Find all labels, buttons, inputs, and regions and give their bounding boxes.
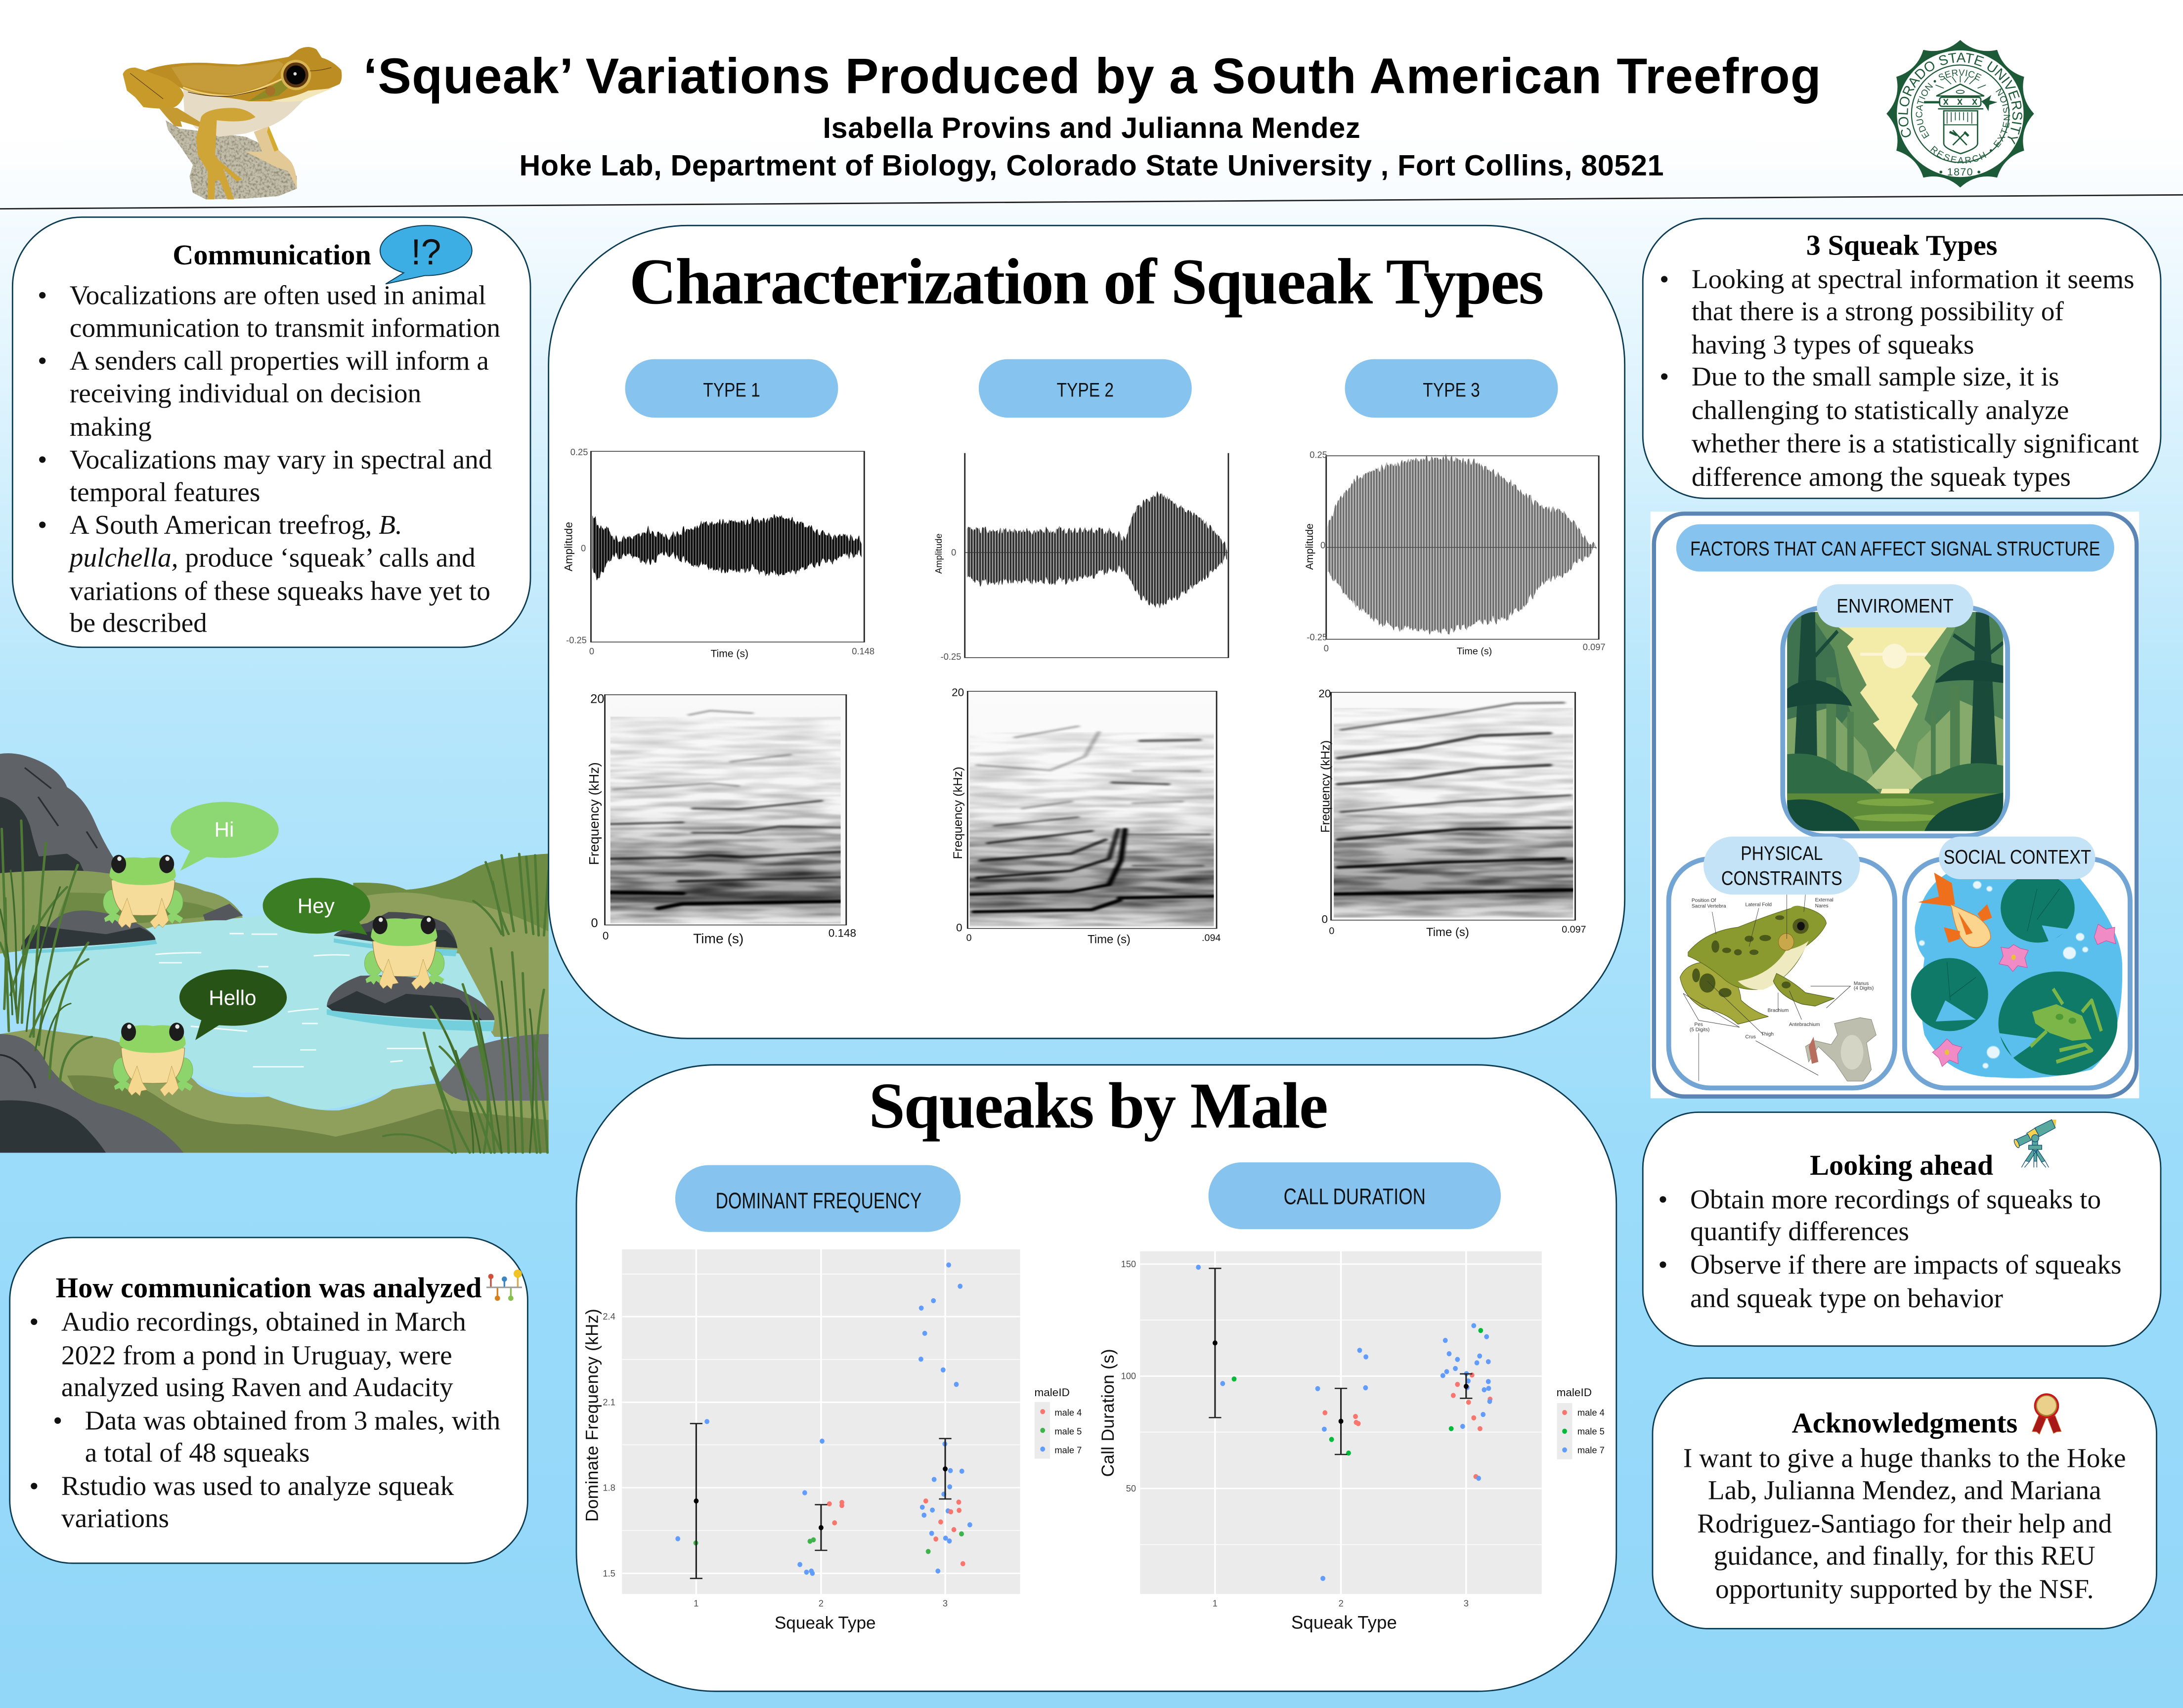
chart: type 1 spectrogram [586, 692, 856, 946]
chart: dominant frequency scatter: Squeak Type [775, 1613, 876, 1632]
anatomy labels: (4 Digits) [1854, 986, 1874, 991]
text block: squeak types bullets: whether there is a statistically significant [1692, 428, 2139, 458]
text block: squeak types bullets: difference among the squeak types [1692, 462, 2071, 492]
text block: communication bullets: communication to transmit information [70, 313, 500, 343]
chart: type 3 spectrogram: 0.097 [1562, 924, 1586, 935]
chart: type 3 spectrogram [1318, 687, 1586, 939]
chart: type 1 waveform: 0 [589, 646, 594, 656]
anatomy labels: Pes [1694, 1022, 1703, 1027]
panel: factors that can affect signal structure [1651, 512, 2139, 1098]
text block: communication bullets: Vocalizations may vary in spectral and [70, 444, 492, 474]
text block: communication bullets: • [38, 510, 47, 540]
chart: type 2 waveform: -0.25 [941, 651, 961, 662]
anatomy labels: Antebrachium [1789, 1022, 1820, 1027]
pill: social context: SOCIAL CONTEXT [1944, 847, 2091, 868]
chart: call duration scatter: 50 [1126, 1483, 1136, 1494]
heading: how communication was analyzed: How communication was analyzed [56, 1272, 481, 1304]
anatomy labels: Lateral Fold [1746, 902, 1772, 908]
pill: type 2: TYPE 2 [1057, 380, 1114, 401]
chart: type 2 waveform: Amplitude [933, 533, 944, 574]
chart: call duration scatter: Squeak Type [1291, 1612, 1397, 1632]
illustration: social context pond [1905, 837, 2130, 1088]
chart: dominant frequency scatter [583, 1249, 1082, 1632]
text block: looking ahead bullets: • [1658, 1184, 1668, 1214]
text block: communication bullets: making [70, 412, 152, 442]
chart: dominant frequency scatter: male 5 [1054, 1426, 1082, 1437]
heading: squeaks by male: Squeaks by Male [869, 1069, 1328, 1142]
heading: 3 squeak types: 3 Squeak Types [1806, 229, 1997, 261]
anatomy labels: Crus [1746, 1034, 1756, 1040]
pill: factors heading [1676, 524, 2114, 572]
text block: communication bullets: • [38, 345, 47, 376]
header divider line [0, 195, 2183, 209]
text block: looking ahead bullets: quantify differences [1690, 1216, 1909, 1246]
logo: Colorado State University seal: • 1870 • [1939, 166, 1981, 178]
text block: squeak types bullets: • [1659, 264, 1669, 294]
chart: type 1 spectrogram: 0.148 [829, 927, 856, 939]
text block: acknowledgments: guidance, and finally, for this REU [1714, 1540, 2096, 1571]
affiliation: Hoke Lab, Department of Biology, Colorado State University , Fort Collins, 80521 [519, 149, 1664, 182]
chart: type 2 spectrogram: 0 [956, 921, 962, 934]
anatomy labels: (5 Digits) [1690, 1027, 1709, 1032]
anatomy labels: Thigh [1761, 1032, 1774, 1037]
anatomy labels: Brachium [1768, 1008, 1789, 1014]
anatomy labels: Position Of [1692, 898, 1716, 903]
chart: dominant frequency scatter: 1.5 [603, 1568, 615, 1579]
pill: type 1: TYPE 1 [703, 380, 760, 401]
chart: call duration scatter: 1 [1213, 1598, 1218, 1608]
chart: type 2 spectrogram: .094 [1202, 933, 1221, 943]
icon: speech bubble: !? [411, 232, 441, 272]
chart: dominant frequency scatter: 2 [819, 1598, 824, 1608]
text block: squeak types bullets: that there is a strong possibility of [1692, 296, 2064, 326]
text block: methods bullets [29, 1307, 500, 1533]
chart: type 3 waveform: 0.097 [1583, 641, 1606, 652]
chart: type 3 waveform: 0.25 [1310, 450, 1327, 460]
pill: type 1 [625, 359, 838, 418]
text block: squeak types bullets: challenging to statistically analyze [1692, 395, 2069, 425]
panel: communication [12, 217, 530, 647]
chart: type 3 waveform: 0 [1320, 540, 1325, 551]
chart: type 1 waveform: Time (s) [710, 648, 748, 659]
text block: squeak types bullets: having 3 types of squeaks [1692, 329, 1974, 359]
panel: 3 squeak types [1643, 218, 2161, 498]
anatomy labels: Nares [1815, 903, 1829, 909]
pill: social context [1939, 837, 2096, 879]
authors: Isabella Provins and Julianna Mendez [823, 111, 1360, 144]
pill: call duration [1209, 1162, 1501, 1229]
chart: type 3 waveform: Time (s) [1457, 646, 1492, 657]
text block: methods bullets: 2022 from a pond in Uruguay, were [61, 1340, 452, 1370]
chart: type 3 spectrogram: Frequency (kHz) [1319, 740, 1333, 833]
text block: looking ahead bullets [1658, 1184, 2122, 1313]
chart: call duration scatter: maleID [1557, 1386, 1592, 1399]
chart: call duration scatter: 2 [1339, 1598, 1344, 1608]
pill: enviroment [1817, 584, 1973, 627]
chart: type 3 spectrogram: 0 [1329, 926, 1334, 937]
speech label: Hey: Hey [298, 895, 335, 918]
panel: characterization of squeak types [549, 225, 1625, 1038]
text block: methods bullets: Data was obtained from 3 males, with [85, 1406, 500, 1436]
chart: dominant frequency scatter: 1.8 [603, 1483, 615, 1493]
chart: type 3 waveform: -0.25 [1307, 632, 1327, 642]
chart: dominant frequency scatter: male 4 [1054, 1408, 1082, 1418]
chart: call duration scatter: 150 [1121, 1259, 1136, 1269]
text block: communication bullets: A South American treefrog, B. [70, 510, 402, 540]
chart: type 1 waveform: 0.148 [852, 646, 874, 656]
chart: type 1 spectrogram: 0 [591, 916, 598, 930]
text block: acknowledgments [1683, 1443, 2126, 1604]
chart: type 1 spectrogram: 0 [603, 930, 609, 942]
chart: call duration scatter [1098, 1251, 1605, 1632]
heading: looking ahead: Looking ahead [1810, 1149, 1993, 1181]
pill: dominant frequency [675, 1165, 961, 1232]
chart: call duration scatter: male 5 [1577, 1426, 1605, 1437]
speech label: Hello: Hello [209, 986, 256, 1010]
pill: type 3: TYPE 3 [1423, 380, 1480, 401]
chart: type 2 spectrogram [951, 686, 1221, 946]
text block: squeak types bullets: Due to the small sample size, it is [1692, 361, 2059, 391]
text block: methods bullets: analyzed using Raven and Audacity [61, 1372, 453, 1402]
chart: type 1 waveform [563, 447, 874, 659]
chart: dominant frequency scatter: 2.4 [603, 1311, 615, 1322]
chart: type 1 spectrogram: Time (s) [693, 931, 743, 946]
text block: looking ahead bullets: and squeak type on behavior [1690, 1283, 2003, 1313]
icon: timeline diagram [486, 1270, 522, 1301]
text block: acknowledgments: I want to give a huge thanks to the Hoke [1683, 1443, 2126, 1473]
text block: methods bullets: Audio recordings, obtained in March [61, 1307, 466, 1337]
illustration: frogs talking at pond [0, 753, 549, 1153]
text block: methods bullets: variations [61, 1503, 169, 1533]
chart: type 3 spectrogram: Time (s) [1426, 926, 1469, 939]
title: ‘Squeak’ Variations Produced by a South American Treefrog [363, 48, 1821, 104]
anatomy labels: Sacral Vertebra [1692, 903, 1726, 909]
illustration: physical constraints frog anatomy [1669, 837, 1895, 1088]
text block: communication bullets: receiving individual on decision [70, 378, 421, 408]
chart: type 2 waveform [933, 453, 1228, 662]
icon: telescope [2013, 1119, 2056, 1167]
chart: type 1 spectrogram: Frequency (kHz) [586, 762, 602, 865]
logo: Colorado State University seal: RESEARCH • EXTENSION [1930, 88, 2010, 164]
pill: enviroment: ENVIROMENT [1836, 595, 1954, 617]
pill: physical constraints: CONSTRAINTS [1721, 868, 1842, 890]
icon: speech bubble [380, 225, 472, 284]
heading: communication: Communication [173, 239, 371, 271]
photo: treefrog on rock [123, 47, 342, 199]
text block: communication bullets: • [38, 280, 47, 310]
chart: type 1 waveform: 0 [581, 543, 586, 553]
chart: type 1 spectrogram: 20 [590, 692, 604, 706]
chart: type 3 waveform [1304, 450, 1606, 657]
panel: acknowledgments [1653, 1378, 2156, 1628]
anatomy labels [1690, 897, 1874, 1040]
chart: call duration scatter: male 4 [1577, 1408, 1605, 1418]
text block: communication bullets: variations of these squeaks have yet to [70, 576, 490, 606]
chart: type 2 spectrogram: Time (s) [1088, 933, 1131, 946]
chart: type 2 waveform: 0 [951, 547, 956, 557]
text block: communication bullets: be described [70, 608, 207, 638]
chart: call duration scatter: 3 [1464, 1598, 1469, 1608]
text block: acknowledgments: Lab, Julianna Mendez, and Mariana [1708, 1475, 2101, 1505]
chart: type 1 waveform: 0.25 [570, 447, 588, 457]
text block: squeak types bullets: Looking at spectral information it seems [1692, 264, 2135, 294]
pill: physical constraints: PHYSICAL [1741, 843, 1823, 864]
chart: type 1 waveform: Amplitude [563, 522, 575, 571]
text block: methods bullets: a total of 48 squeaks [85, 1437, 310, 1467]
text block: communication bullets: • [38, 444, 47, 474]
chart: type 3 spectrogram: 0 [1321, 913, 1328, 925]
chart: dominant frequency scatter: 2.1 [603, 1397, 615, 1407]
chart: type 2 spectrogram: Frequency (kHz) [951, 767, 965, 859]
text block: communication bullets: temporal features [70, 477, 260, 507]
text block: communication bullets [38, 280, 500, 638]
logo: Colorado State University seal [1886, 40, 2034, 188]
chart: call duration scatter: 100 [1121, 1371, 1136, 1381]
speech label: Hi: Hi [214, 818, 234, 841]
chart: call duration scatter: Call Duration (s) [1098, 1349, 1118, 1477]
logo: Colorado State University seal: EDUCATION • SERVICE [1916, 69, 1982, 139]
pill: call duration: CALL DURATION [1284, 1184, 1426, 1209]
illustration: forest environment [1783, 584, 2008, 836]
pill: type 2 [979, 359, 1192, 418]
chart: dominant frequency scatter: 3 [943, 1598, 948, 1608]
text block: acknowledgments: Rodriguez-Santiago for their help and [1697, 1508, 2112, 1538]
chart: type 3 waveform: 0 [1324, 643, 1329, 653]
text block: communication bullets: Vocalizations are often used in animal [70, 280, 486, 310]
panel: looking ahead [1643, 1112, 2161, 1346]
pill: physical constraints [1703, 837, 1860, 895]
text block: squeak types bullets: • [1659, 361, 1669, 391]
anatomy labels: External [1815, 897, 1834, 903]
panel: how communication was analyzed [10, 1238, 527, 1563]
chart: dominant frequency scatter: maleID [1035, 1386, 1070, 1399]
chart: type 2 spectrogram: 0 [966, 933, 972, 943]
panel: squeaks by male [576, 1065, 1616, 1691]
text block: methods bullets: • [53, 1406, 62, 1436]
text block: communication bullets: pulchella, produce ‘squeak’ calls and [68, 542, 476, 572]
anatomy labels: Manus [1854, 981, 1869, 986]
chart: dominant frequency scatter: male 7 [1054, 1445, 1082, 1455]
text block: communication bullets: A senders call properties will inform a [70, 345, 489, 376]
text block: looking ahead bullets: Obtain more recordings of squeaks to [1690, 1184, 2101, 1214]
text block: methods bullets: Rstudio was used to analyze squeak [61, 1471, 454, 1501]
pill: factors heading: FACTORS THAT CAN AFFECT SIGNAL STRUCTURE [1690, 537, 2100, 560]
logo: Colorado State University seal: COLORADO STATE UNIVERSITY [1898, 52, 2022, 144]
icon: medal [2032, 1393, 2061, 1434]
text block: acknowledgments: opportunity supported by the NSF. [1715, 1574, 2094, 1604]
text block: squeak types bullets [1659, 264, 2139, 492]
chart: type 2 spectrogram: 20 [952, 686, 964, 698]
chart: type 3 spectrogram: 20 [1318, 687, 1331, 700]
chart: call duration scatter: male 7 [1577, 1445, 1605, 1455]
pill: type 3 [1345, 359, 1558, 418]
text block: methods bullets: • [29, 1307, 39, 1337]
chart: dominant frequency scatter: Dominate Frequency (kHz) [583, 1309, 602, 1522]
pill: dominant frequency: DOMINANT FREQUENCY [716, 1188, 921, 1213]
heading: acknowledgments: Acknowledgments [1792, 1407, 2017, 1439]
text block: looking ahead bullets: Observe if there are impacts of squeaks [1690, 1249, 2122, 1280]
chart: dominant frequency scatter: 1 [694, 1598, 699, 1608]
chart: type 1 waveform: -0.25 [566, 635, 587, 645]
chart: type 3 waveform: Amplitude [1304, 523, 1315, 570]
text block: methods bullets: • [29, 1471, 39, 1501]
heading: characterization of squeak types: Characterization of Squeak Types [629, 245, 1544, 318]
text block: looking ahead bullets: • [1658, 1249, 1668, 1280]
